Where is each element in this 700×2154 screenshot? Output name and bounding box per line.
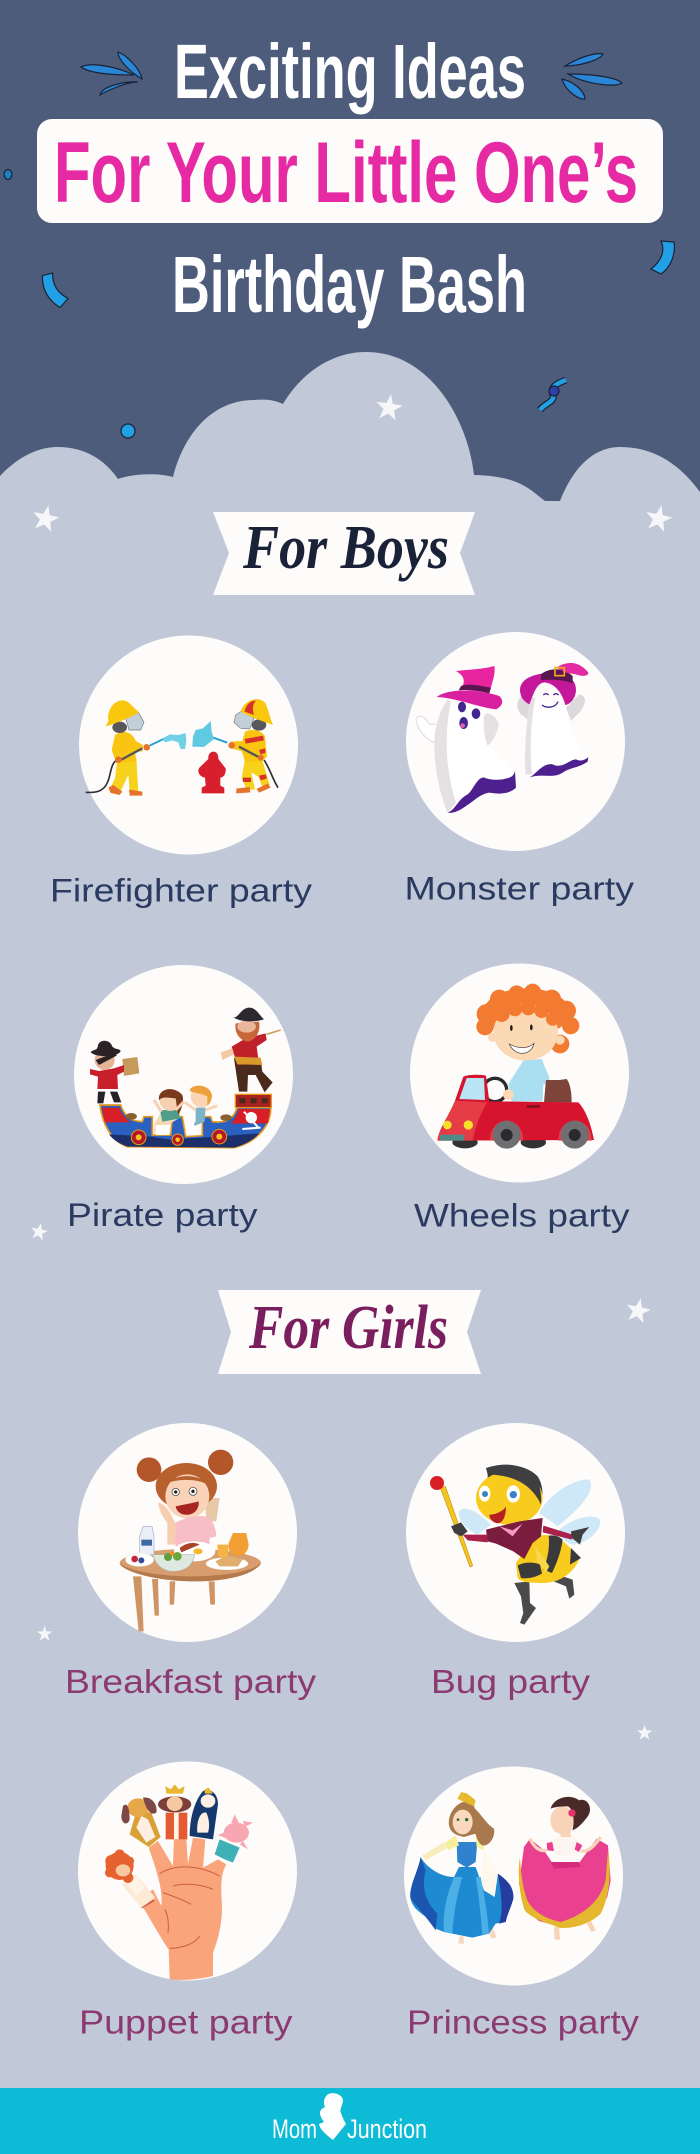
label: Firefighter party [50,872,312,908]
footer bar [0,2088,700,2154]
label: Breakfast party [65,1663,317,1700]
card: Firefighter party [50,636,312,908]
decorative stars [29,392,674,1739]
logo wordmark: Junction: Junction [347,2114,427,2144]
confetti: right teardrops [562,54,622,99]
card: Breakfast party [65,1423,317,1700]
heading: For Boys: For Boys [242,514,449,582]
illustration: pirates and children on a ship [90,1008,281,1148]
label: Bug party [431,1663,591,1700]
illustration: girl at breakfast table [120,1450,261,1631]
title line 3: Birthday Bash [172,240,527,329]
title line 1: Exciting Ideas [174,29,526,115]
label: Monster party [404,870,634,906]
header panel: dark background with clouds [0,0,700,501]
illustration: two ghosts in witch hats [416,663,588,813]
card: Puppet party [78,1762,297,2040]
illustration: finger puppets on a hand [105,1784,253,1980]
illustration: queen bee with scepter [430,1465,600,1625]
card: Wheels party [410,964,630,1234]
confetti: dots, crescents and squiggle [4,170,674,438]
card: Princess party [404,1766,640,2040]
logo wordmark: Mom: Mom [272,2114,317,2144]
label: Puppet party [79,2004,293,2040]
card: Monster party [404,632,634,906]
confetti: left teardrops [81,52,142,95]
illustration: two princesses in gowns [410,1792,611,1944]
label: Pirate party [67,1197,258,1233]
card: Bug party [406,1423,625,1700]
illustration: firefighters and hydrant [86,699,278,796]
label: Wheels party [414,1198,630,1234]
logo icon: mother and child heart [319,2093,346,2140]
heading: For Girls: For Girls [248,1294,448,1362]
label: Princess party [407,2004,640,2040]
heading: For Girls [218,1290,481,1374]
card: Pirate party [67,965,293,1233]
illustration: boy in a red car [437,984,594,1149]
